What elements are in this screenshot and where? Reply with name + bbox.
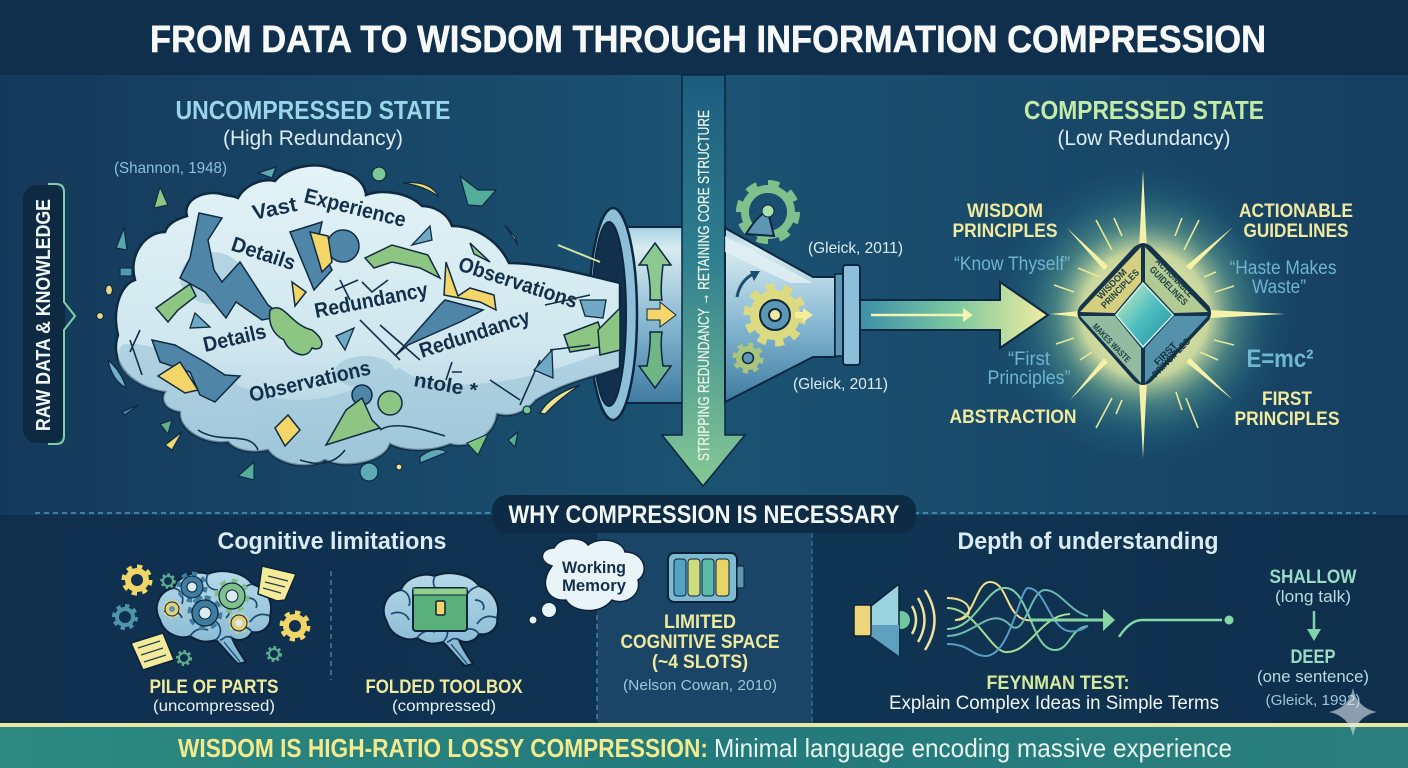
icon: battery slots bbox=[668, 553, 744, 602]
icon: yellow gear bbox=[748, 288, 802, 342]
citations: Gleick: (Gleick, 2011) bbox=[808, 240, 903, 257]
wisdom diamond: PRINCIPLES bbox=[1099, 267, 1142, 311]
scattered fragments bbox=[96, 167, 600, 481]
labels: compressed outputs bbox=[950, 201, 1353, 430]
cloud of raw data bbox=[116, 166, 620, 465]
footer banner: Minimal language encoding massive experience bbox=[714, 733, 1232, 763]
icon: brain with toolbox bbox=[384, 573, 498, 666]
icon: flow arrows bbox=[639, 243, 676, 388]
caption: folded toolbox: FOLDED TOOLBOX bbox=[366, 677, 523, 698]
wisdom diamond bbox=[1078, 243, 1211, 385]
caption: folded toolbox bbox=[366, 677, 523, 715]
scale: shallow to deep: (one sentence) bbox=[1257, 667, 1369, 686]
cloud words: Redundancy bbox=[313, 278, 430, 323]
label: raw data and knowledge: RAW DATA & KNOWLEDGE bbox=[33, 199, 55, 431]
gears bbox=[115, 568, 307, 664]
labels: compressed outputs: ABSTRACTION bbox=[950, 407, 1076, 428]
cloud words: Vast bbox=[250, 193, 299, 225]
heading: compressed state: (Low Redundancy) bbox=[1058, 127, 1230, 150]
text: limited cognitive space bbox=[620, 612, 780, 694]
scale: shallow to deep: (Gleick, 1992) bbox=[1266, 692, 1360, 709]
caption: folded toolbox: (compressed) bbox=[392, 698, 496, 715]
separator: cognitive bbox=[331, 571, 597, 720]
citations: Gleick bbox=[793, 240, 903, 393]
watermark sparkle bbox=[1329, 688, 1377, 736]
labels: compressed outputs: PRINCIPLES bbox=[952, 221, 1058, 242]
heading: cognitive limitations: Cognitive limitations bbox=[218, 528, 446, 555]
cloud words: Details bbox=[228, 233, 298, 275]
funnel: intake ring bbox=[589, 208, 637, 420]
funnel: compression cone bbox=[725, 184, 860, 402]
labels: compressed outputs: E=mc² bbox=[1246, 345, 1314, 373]
thought bubble: working memory bbox=[529, 539, 644, 624]
heading: depth of understanding: Depth of understanding bbox=[958, 528, 1218, 555]
caption: pile of parts: PILE OF PARTS bbox=[150, 677, 278, 698]
text: limited cognitive space: LIMITED bbox=[664, 612, 736, 633]
text: limited cognitive space: (Nelson Cowan, 2010) bbox=[623, 677, 777, 694]
wisdom diamond: FIRST bbox=[1152, 340, 1180, 368]
bottom panels bbox=[0, 515, 1408, 725]
arrow: stripping redundancy: STRIPPING REDUNDANCY → RETAINING CORE STRUCTURE bbox=[696, 110, 713, 461]
labels: compressed outputs: ACTIONABLE bbox=[1239, 201, 1353, 222]
labels: compressed outputs: Waste” bbox=[1252, 277, 1306, 298]
title bar bbox=[0, 0, 1408, 75]
scale: shallow to deep: DEEP bbox=[1290, 647, 1336, 668]
text: limited cognitive space: COGNITIVE SPACE bbox=[620, 632, 780, 653]
scale: shallow to deep: (long talk) bbox=[1275, 587, 1351, 606]
caption: pile of parts: (uncompressed) bbox=[153, 698, 275, 715]
wisdom diamond: WISDOM bbox=[1095, 267, 1130, 302]
text: feynman test bbox=[889, 673, 1219, 714]
labels: compressed outputs: “Haste Makes bbox=[1230, 258, 1336, 279]
citations: Gleick: (Gleick, 2011) bbox=[793, 376, 888, 393]
heading: compressed state: COMPRESSED STATE bbox=[1024, 95, 1264, 125]
glow and rays bbox=[995, 164, 1295, 464]
cloud words: Redundancy bbox=[416, 305, 533, 363]
icon: top green gear bbox=[740, 184, 796, 240]
heading: uncompressed state: UNCOMPRESSED STATE bbox=[176, 95, 450, 125]
heading: compressed state bbox=[1024, 95, 1264, 150]
labels: compressed outputs: WISDOM bbox=[967, 201, 1043, 222]
wisdom diamond: PRINCIPLES bbox=[1150, 336, 1193, 380]
cloud soft shading bbox=[118, 252, 618, 465]
labels: compressed outputs: “First bbox=[1008, 349, 1051, 370]
cloud words: ntole * bbox=[412, 369, 479, 402]
cloud words bbox=[201, 185, 580, 407]
wisdom diamond: GUIDELINES bbox=[1147, 264, 1189, 308]
scale: shallow to deep bbox=[1257, 567, 1369, 709]
icon: small gear bbox=[735, 345, 761, 371]
footer banner: WISDOM IS HIGH-RATIO LOSSY COMPRESSION: bbox=[178, 733, 708, 763]
citation: Shannon: (Shannon, 1948) bbox=[114, 160, 227, 177]
waves: feynman compression bbox=[947, 582, 1234, 656]
heading: uncompressed state bbox=[176, 95, 450, 150]
labels: compressed outputs: FIRST bbox=[1262, 389, 1312, 410]
label: raw data and knowledge bbox=[23, 184, 75, 444]
arrow: stripping redundancy bbox=[662, 75, 745, 486]
labels: compressed outputs: “Know Thyself” bbox=[954, 254, 1070, 275]
icon: brain with scattered parts bbox=[115, 566, 307, 670]
cloud shards: yellow bbox=[158, 232, 496, 446]
footer banner bbox=[0, 723, 1408, 768]
labels: compressed outputs: GUIDELINES bbox=[1244, 221, 1348, 242]
text: feynman test: Explain Complex Ideas in Simple Terms bbox=[889, 693, 1219, 714]
icon: speaker bbox=[854, 584, 934, 656]
cloud words: Observations bbox=[247, 357, 373, 407]
section heading pill bbox=[492, 495, 916, 533]
text: limited cognitive space: (~4 SLOTS) bbox=[652, 652, 748, 673]
thought bubble: working memory: Working bbox=[562, 558, 626, 577]
labels: compressed outputs: Principles” bbox=[988, 368, 1070, 389]
thought bubble: working memory: Memory bbox=[562, 576, 627, 595]
title bar: FROM DATA TO WISDOM THROUGH INFORMATION COMPRESSION bbox=[150, 19, 1266, 61]
scale: shallow to deep: SHALLOW bbox=[1270, 567, 1357, 588]
labels: compressed outputs: PRINCIPLES bbox=[1234, 409, 1340, 430]
cloud words: Details bbox=[201, 320, 268, 357]
dashed divider bbox=[35, 512, 1376, 514]
cloud shards: green bbox=[156, 243, 620, 445]
section heading pill: WHY COMPRESSION IS NECESSARY bbox=[508, 501, 900, 529]
wisdom diamond: ACTIONABLE bbox=[1153, 256, 1195, 300]
cloud shards: outline marks bbox=[130, 280, 590, 463]
divider: right panel bbox=[811, 533, 813, 725]
cloud words: Observations bbox=[455, 253, 580, 313]
caption: pile of parts bbox=[150, 677, 278, 715]
notes bbox=[258, 566, 296, 601]
text: feynman test: FEYNMAN TEST: bbox=[986, 673, 1130, 694]
cloud words: Experience bbox=[302, 185, 408, 232]
wisdom diamond: MAKES WASTE bbox=[1091, 321, 1132, 364]
arrow: output pipe bbox=[860, 282, 1048, 348]
cloud shards: blue bbox=[152, 213, 483, 405]
heading: uncompressed state: (High Redundancy) bbox=[223, 127, 403, 150]
funnel: intake cylinder bbox=[589, 208, 685, 420]
